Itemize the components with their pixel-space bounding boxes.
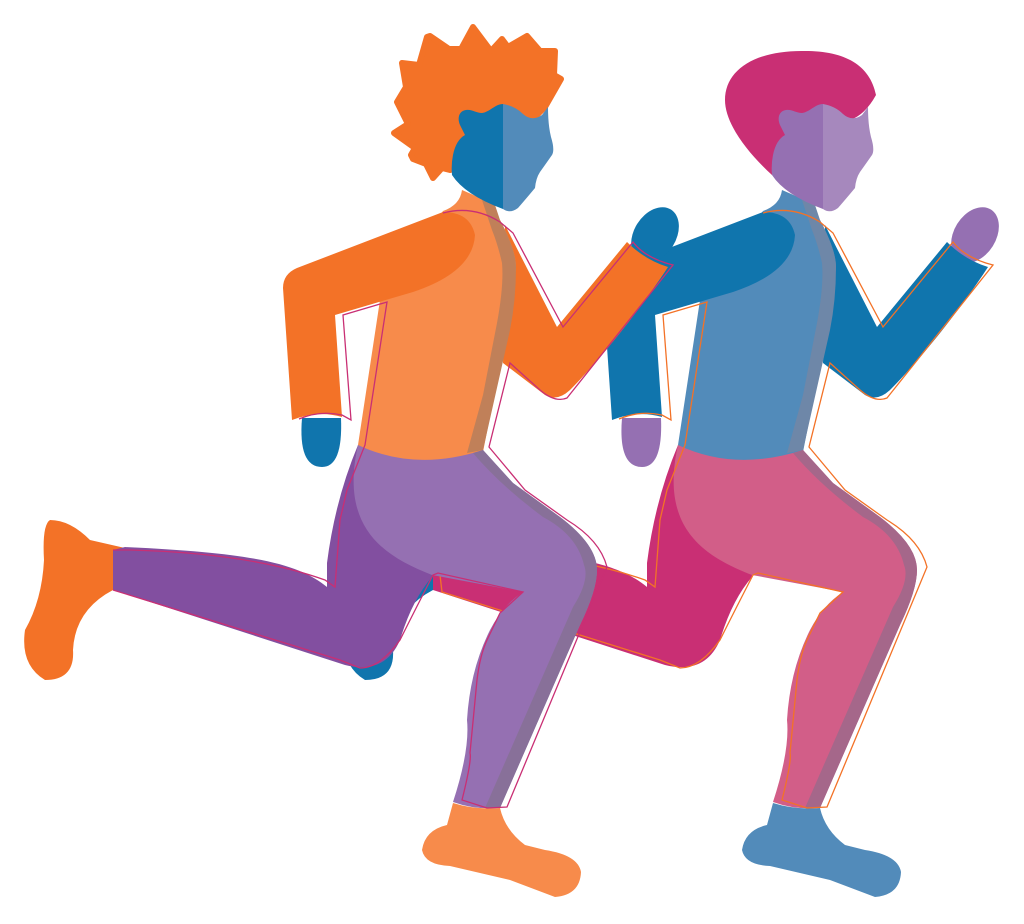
outline: offset silhouette (113, 210, 673, 808)
runner: right figure, blue and pink (344, 51, 1009, 897)
head (452, 104, 553, 211)
far arm (823, 225, 988, 398)
back shoe (24, 520, 125, 680)
head (772, 104, 873, 211)
runner: left figure, orange and purple (24, 27, 689, 897)
front shoe (422, 803, 581, 897)
back shoe (344, 520, 445, 680)
icon: near hand (621, 418, 661, 467)
front leg (354, 445, 597, 808)
back leg (433, 445, 752, 667)
icon: near hand (301, 418, 341, 467)
front leg (674, 445, 917, 808)
near arm (603, 212, 795, 420)
front leg shadow strip (793, 450, 917, 808)
hair (725, 51, 876, 175)
front leg shadow strip (473, 450, 597, 808)
torso shadow strip (787, 200, 836, 453)
icon: far hand (941, 198, 1009, 272)
far arm (503, 225, 668, 398)
front shoe (742, 803, 901, 897)
back leg (113, 445, 432, 667)
outline: offset silhouette (433, 210, 993, 808)
torso shadow strip (467, 200, 516, 453)
torso (678, 190, 836, 470)
torso (358, 190, 516, 470)
icon: far hand (621, 198, 689, 272)
near arm (283, 212, 475, 420)
hair (394, 27, 561, 178)
